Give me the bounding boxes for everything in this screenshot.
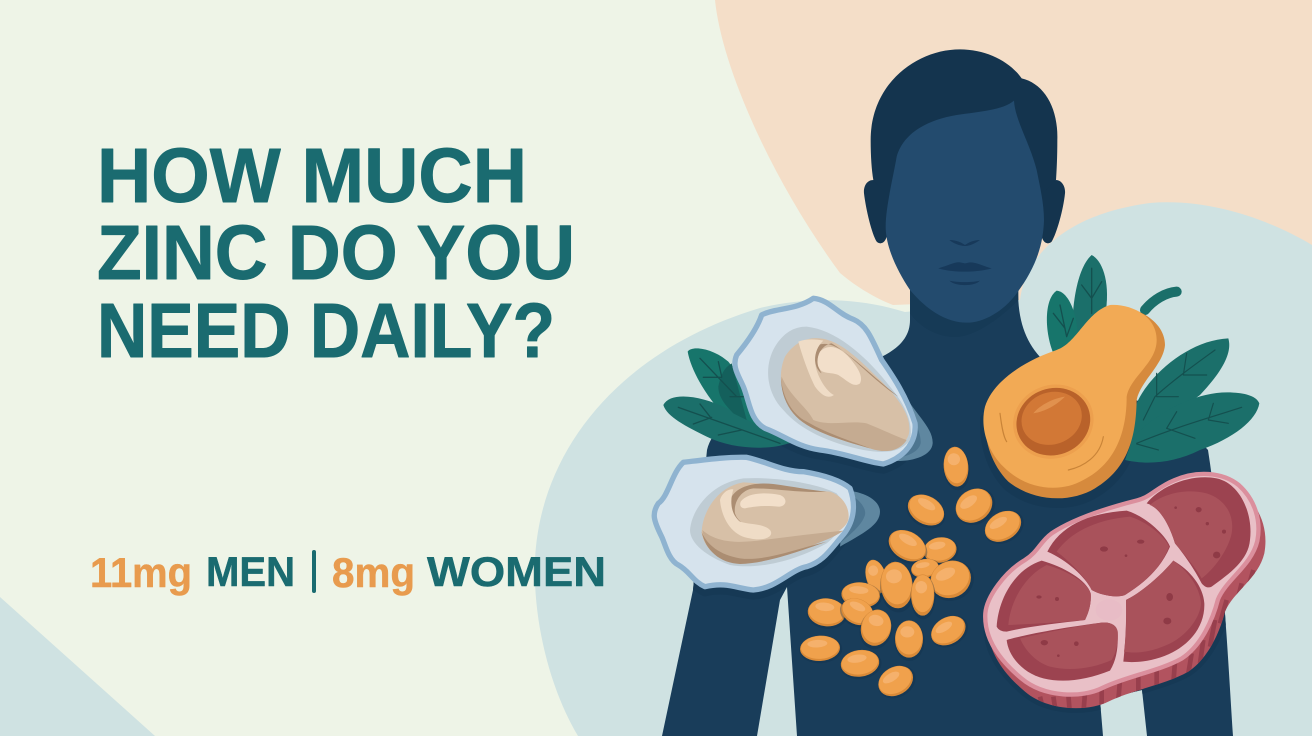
title: HOW MUCH	[97, 133, 527, 219]
avocado pit	[1003, 373, 1104, 470]
corner triangle	[0, 597, 155, 736]
cut A	[1047, 511, 1170, 596]
subtitle: daily amounts: 11mg	[90, 549, 192, 596]
title: ZINC DO YOU	[97, 210, 575, 296]
cut B	[1147, 477, 1251, 587]
cut D	[997, 561, 1091, 632]
face	[886, 101, 1044, 323]
subtitle: daily amounts: 8mg	[332, 549, 415, 596]
oyster meat	[702, 482, 849, 563]
steak	[983, 472, 1266, 708]
left leaves	[663, 348, 790, 448]
back leaves	[1072, 255, 1107, 360]
title: NEED DAILY?	[97, 288, 555, 374]
right leaves and avocado	[983, 255, 1259, 498]
ears	[864, 180, 1065, 243]
capsules	[798, 446, 1030, 705]
marrow	[1096, 599, 1122, 621]
light teal blob	[535, 202, 1312, 736]
cut C	[1123, 561, 1204, 662]
avocado skin	[985, 307, 1165, 498]
side	[991, 510, 1266, 708]
head	[864, 49, 1065, 337]
peach blob	[715, 0, 1312, 305]
lower oyster	[654, 457, 880, 590]
neck shadow	[910, 283, 1018, 337]
body	[662, 280, 1233, 736]
avocado flesh	[983, 305, 1157, 488]
subtitle: daily amounts: WOMEN	[427, 548, 606, 595]
marbling	[1036, 506, 1226, 657]
cut E	[1007, 622, 1118, 681]
subtitle: daily amounts	[90, 548, 606, 596]
nose and lips	[938, 240, 992, 285]
rim and fat	[985, 474, 1258, 695]
stem	[1145, 292, 1177, 310]
side leaves	[1130, 338, 1229, 447]
title	[97, 133, 575, 374]
person silhouette	[654, 49, 1265, 736]
oyster meat	[781, 338, 909, 450]
food shadows on body	[693, 400, 1226, 710]
hair	[871, 49, 1057, 217]
subtitle: daily amounts: MEN	[206, 548, 295, 595]
upper oyster	[735, 298, 933, 464]
